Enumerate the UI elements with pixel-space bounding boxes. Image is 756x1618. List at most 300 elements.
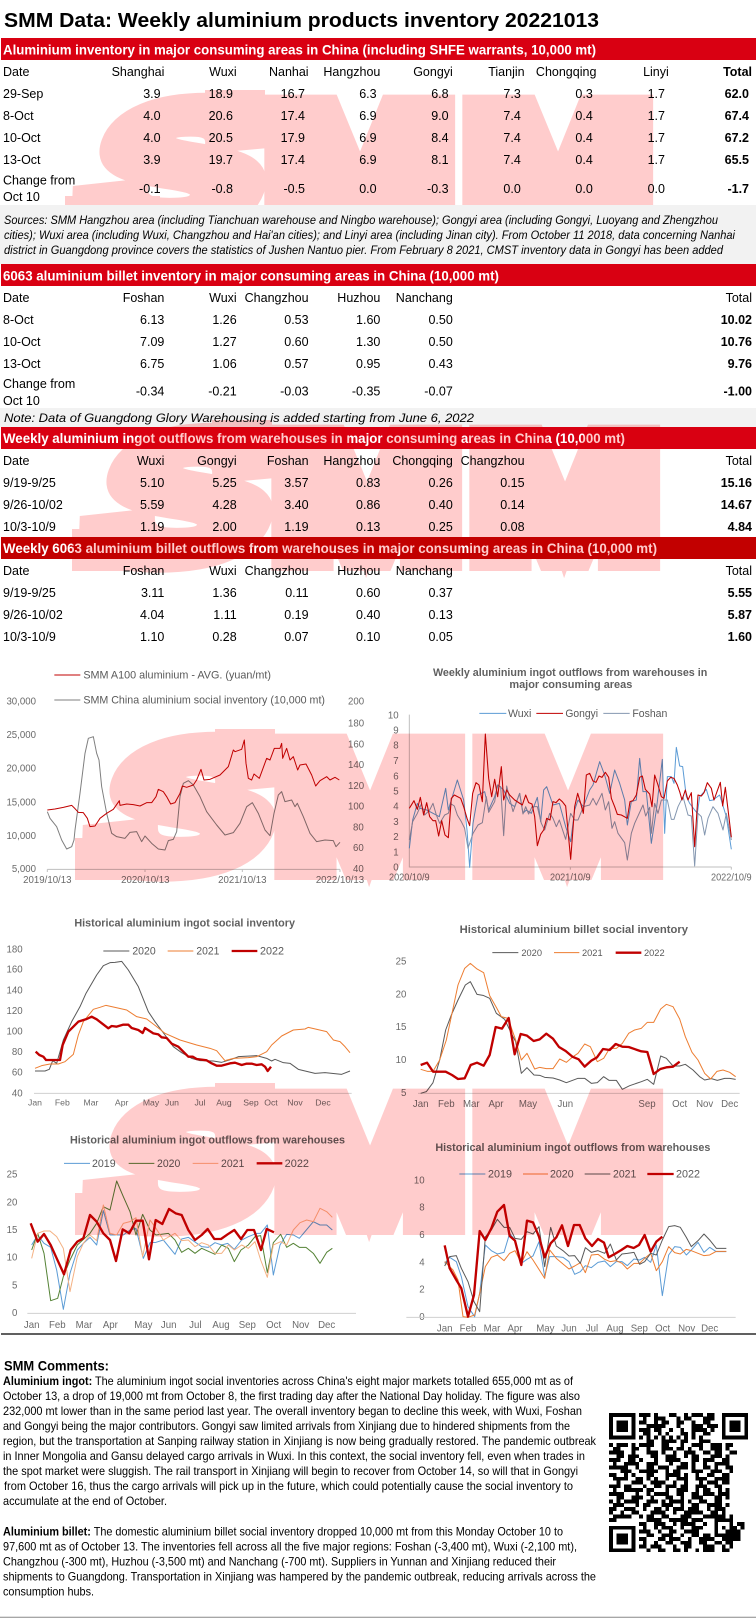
series: Foshan bbox=[409, 785, 731, 866]
y axis labels: 120 bbox=[7, 1006, 23, 1017]
y axis labels: 80 bbox=[12, 1047, 23, 1058]
header row: Gongyi bbox=[413, 65, 453, 79]
row: 10-Oct: 20.5 bbox=[209, 131, 233, 145]
aluminium billet comment: consumption hubs. bbox=[3, 1584, 94, 1598]
header row: Chongqing bbox=[536, 65, 596, 79]
header row: Huzhou bbox=[337, 291, 380, 305]
y axis labels bbox=[396, 956, 406, 1099]
aluminium ingot comment: in Inner Mongolia and Gansu delayed cargo arrivals in Wuxi. In this context, the social inventory fell, even when trades in bbox=[3, 1449, 585, 1463]
row: 9/19-9/25: 0.37 bbox=[428, 586, 453, 600]
row: 10-Oct: 17.9 bbox=[281, 131, 305, 145]
legend bbox=[459, 1169, 700, 1181]
aluminium billet comment: 97,600 mt as of October 13. The inventories fell across all the five major regions: Foshan (-3,400 mt), Wuxi (-2,100 mt), bbox=[3, 1540, 577, 1554]
series: 2019 bbox=[445, 1233, 726, 1317]
header row: Hangzhou bbox=[323, 65, 380, 79]
row: 29-Sep: 6.3 bbox=[359, 87, 377, 101]
series: 2020 bbox=[32, 1181, 332, 1301]
watermark: SMM logos: S bbox=[66, 401, 306, 596]
header row: Wuxi bbox=[209, 291, 237, 305]
row: 10-Oct: 10-Oct bbox=[3, 335, 41, 349]
row: 10-Oct: 1.7 bbox=[648, 131, 665, 145]
row: change from Oct 10: 0.0 bbox=[648, 182, 665, 196]
row: 29-Sep: 29-Sep bbox=[3, 87, 43, 101]
y axis labels: 8 bbox=[393, 741, 399, 752]
watermark: SMM logos: M bbox=[471, 400, 658, 595]
row: 8-Oct: 8-Oct bbox=[3, 313, 34, 327]
header row: Huzhou bbox=[337, 564, 380, 578]
band: billet inventory heading bbox=[1, 264, 756, 286]
y axis labels: 6 bbox=[393, 771, 399, 782]
x axis: Feb bbox=[49, 1320, 66, 1331]
row: 29-Sep: 18.9 bbox=[209, 87, 233, 101]
row: 8-Oct: 67.4 bbox=[725, 109, 749, 123]
header row: Nanchang bbox=[396, 291, 453, 305]
row: 9/19-9/25: 1.36 bbox=[212, 586, 237, 600]
y axis labels: 2 bbox=[419, 1285, 425, 1296]
note panel bbox=[0, 408, 756, 427]
y axis labels bbox=[388, 710, 399, 873]
row: 9/19-9/25: 9/19-9/25 bbox=[3, 586, 56, 600]
y axis labels: 25 bbox=[396, 956, 406, 967]
header row: Wuxi bbox=[209, 564, 237, 578]
row: change from Oct 10: -1.7 bbox=[727, 182, 749, 196]
header row: Hangzhou bbox=[323, 454, 380, 468]
legend: SMM A100 aluminium - AVG. (yuan/mt) bbox=[83, 670, 271, 682]
header row: Changzhou bbox=[245, 564, 309, 578]
aluminium ingot comment: Aluminium ingot: The aluminium ingot social inventories across China's eight major markets totalled 655,000 mt as of bbox=[3, 1374, 574, 1388]
QR code bbox=[609, 1413, 748, 1552]
y axis labels: 0 bbox=[12, 1308, 17, 1319]
row: change from Oct 10: -0.5 bbox=[283, 182, 305, 196]
right axis labels: 200 bbox=[348, 697, 364, 708]
right axis labels: 80 bbox=[353, 822, 364, 833]
legend bbox=[479, 708, 667, 720]
header row: Chongqing bbox=[392, 454, 453, 468]
series: 2022 bbox=[421, 1018, 680, 1079]
x axis: Dec bbox=[318, 1320, 335, 1331]
row: 9/26-10/02: 14.67 bbox=[721, 498, 752, 512]
x axis: Oct bbox=[264, 1097, 278, 1107]
y axis labels: 4 bbox=[393, 802, 399, 813]
x axis: May bbox=[519, 1099, 537, 1110]
row: change from Oct 10: -0.1 bbox=[139, 182, 161, 196]
header row: Foshan bbox=[267, 454, 309, 468]
row: 13-Oct: 9.76 bbox=[728, 357, 752, 371]
right axis labels: 60 bbox=[353, 843, 364, 854]
y axis labels bbox=[414, 1175, 425, 1323]
legend: 2021 bbox=[221, 1158, 244, 1170]
x axis: Feb bbox=[55, 1097, 70, 1107]
series: 2022 bbox=[445, 1205, 662, 1317]
table: aluminium inventory bbox=[0, 38, 756, 264]
chart: historical billet social inventory bbox=[396, 924, 740, 1110]
y axis labels: 180 bbox=[7, 944, 23, 955]
x axis: Aug bbox=[216, 1097, 232, 1107]
row: 13-Oct: 1.7 bbox=[648, 153, 665, 167]
row: 9/19-9/25: 3.57 bbox=[284, 476, 309, 490]
x axis: Dec bbox=[721, 1099, 738, 1110]
right axis labels: 160 bbox=[348, 739, 364, 750]
chart title: Historical aluminium ingot social inventory bbox=[74, 918, 296, 930]
row: change from Oct 10 bbox=[3, 174, 749, 204]
row: change from Oct 10: -0.3 bbox=[427, 182, 449, 196]
row: 10-Oct: 0.4 bbox=[575, 131, 593, 145]
header row: Wuxi bbox=[137, 454, 164, 468]
row: 10-Oct: 1.30 bbox=[356, 335, 380, 349]
y axis labels: 60 bbox=[12, 1068, 23, 1079]
row: 9/26-10/02: 3.40 bbox=[284, 498, 309, 512]
header row: Date bbox=[3, 564, 29, 578]
row: change from Oct 10: -0.07 bbox=[424, 384, 453, 398]
row: 13-Oct bbox=[3, 153, 749, 167]
row: 10-Oct: 6.9 bbox=[359, 131, 377, 145]
legend: 2021 bbox=[582, 948, 603, 958]
row: 13-Oct: 0.4 bbox=[575, 153, 593, 167]
row: 10/3-10/9: 1.19 bbox=[284, 520, 309, 534]
y axis labels: 4 bbox=[419, 1257, 425, 1268]
series: 2022 bbox=[31, 1209, 274, 1274]
row: 10/3-10/9: 1.60 bbox=[728, 630, 752, 644]
header row bbox=[3, 65, 752, 79]
row: 10-Oct: 10.76 bbox=[721, 335, 752, 349]
table: billet outflows bbox=[1, 537, 756, 644]
row: 29-Sep: 1.7 bbox=[648, 87, 665, 101]
row: 10-Oct: 10-Oct bbox=[3, 131, 41, 145]
y axis labels: 5 bbox=[12, 1280, 17, 1291]
sources note panel bbox=[0, 205, 756, 264]
row: 9/26-10/02: 0.19 bbox=[284, 608, 309, 622]
aluminium ingot comment: 232,000 mt lower than in the same period last year. The overall inventory began to decline this week, with Wuxi, Foshan bbox=[3, 1404, 582, 1418]
header row: Changzhou bbox=[461, 454, 525, 468]
header row: Date bbox=[3, 291, 29, 305]
series: 2021 bbox=[421, 963, 736, 1079]
axes bbox=[389, 715, 752, 884]
header row: Foshan bbox=[123, 564, 164, 578]
band: billet outflows heading: Weekly 6063 aluminium billet outflows from warehouses in major consuming areas in China (10,000 mt) bbox=[3, 540, 657, 556]
row: 10-Oct: 7.09 bbox=[140, 335, 164, 349]
row: 10/3-10/9 bbox=[3, 630, 752, 644]
chart title: major consuming areas bbox=[509, 679, 632, 691]
header row: Date bbox=[3, 454, 29, 468]
left axis labels: 20,000 bbox=[6, 764, 36, 775]
right axis labels: 140 bbox=[348, 760, 364, 771]
row: 29-Sep: 3.9 bbox=[143, 87, 161, 101]
row: 9/19-9/25: 0.15 bbox=[500, 476, 525, 490]
watermark: SMM logos: M bbox=[276, 1064, 463, 1259]
row: 9/26-10/02: 0.14 bbox=[500, 498, 525, 512]
x axis: May bbox=[536, 1323, 555, 1334]
row: 9/26-10/02: 1.11 bbox=[213, 608, 237, 622]
row: 13-Oct: 1.06 bbox=[212, 357, 237, 371]
x axis: Mar bbox=[84, 1097, 99, 1107]
left axis labels bbox=[6, 696, 36, 875]
x axis: Apr bbox=[103, 1320, 119, 1331]
x axis bbox=[28, 1093, 352, 1107]
watermark: SMM logos: S bbox=[69, 1065, 309, 1260]
x axis: May bbox=[134, 1320, 153, 1331]
header row: Nanchang bbox=[396, 564, 453, 578]
row: 10-Oct bbox=[3, 335, 752, 349]
y axis labels: 15 bbox=[396, 1022, 406, 1033]
left axis labels: 5,000 bbox=[12, 864, 36, 875]
y axis labels: 20 bbox=[396, 989, 406, 1000]
row: 8-Oct: 20.6 bbox=[209, 109, 233, 123]
row: 10/3-10/9: 0.13 bbox=[356, 520, 380, 534]
x axis: Jul bbox=[189, 1320, 202, 1331]
row: 13-Oct: 0.57 bbox=[284, 357, 309, 371]
row: 8-Oct: 0.53 bbox=[284, 313, 309, 327]
series: 2020 bbox=[421, 982, 736, 1093]
chart title: Historical aluminium ingot outflows from warehouses bbox=[435, 1142, 710, 1154]
row: 13-Oct: 13-Oct bbox=[3, 153, 41, 167]
table: ingot outflows bbox=[1, 427, 756, 534]
y axis labels: 160 bbox=[7, 965, 23, 976]
series: 2022 bbox=[36, 1017, 271, 1071]
SMM comments bbox=[3, 1358, 597, 1598]
x axis: Aug bbox=[212, 1320, 230, 1331]
row: 10/3-10/9: 1.19 bbox=[140, 520, 164, 534]
row: 13-Oct: 0.95 bbox=[356, 357, 380, 371]
x axis: Apr bbox=[115, 1097, 129, 1107]
header row: Changzhou bbox=[245, 291, 309, 305]
row: 8-Oct: 0.4 bbox=[575, 109, 593, 123]
x axis: Jul bbox=[586, 1323, 598, 1334]
y axis labels: 10 bbox=[414, 1175, 425, 1186]
row: 8-Oct: 7.4 bbox=[503, 109, 521, 123]
aluminium billet comment: shipments to Guangdong. Transportation in Xinjiang was hampered by the pandemic outbreak, reducing arrivals across the bbox=[3, 1570, 596, 1584]
band: billet inventory heading: 6063 aluminium billet inventory in major consuming areas in China (10,000 mt) bbox=[3, 268, 499, 284]
aluminium ingot comment bbox=[3, 1374, 597, 1508]
header row: Shanghai bbox=[112, 65, 164, 79]
band: ingot outflows heading bbox=[1, 427, 756, 449]
row: 8-Oct: 8-Oct bbox=[3, 109, 34, 123]
watermark: SMM logos bbox=[59, 70, 661, 1260]
legend bbox=[64, 1158, 309, 1170]
row: 9/19-9/25: 5.55 bbox=[728, 586, 752, 600]
chart title bbox=[433, 667, 708, 691]
x axis: 2022/10/13 bbox=[316, 875, 364, 886]
x axis: Sep bbox=[638, 1099, 656, 1110]
series: social inventory bbox=[47, 737, 340, 850]
y axis labels: 5 bbox=[401, 1088, 406, 1099]
row: 9/26-10/02: 5.59 bbox=[140, 498, 164, 512]
aluminium billet comment: Aluminium billet: The domestic aluminium billet social inventory dropped 10,000 mt from this Monday October 10 to bbox=[3, 1524, 563, 1538]
row: 10-Oct: 0.50 bbox=[428, 335, 453, 349]
x axis: May bbox=[143, 1097, 160, 1107]
row: 8-Oct: 1.60 bbox=[356, 313, 380, 327]
row: change from Oct 10: 0.0 bbox=[503, 182, 521, 196]
row: 29-Sep: 62.0 bbox=[725, 87, 749, 101]
legend: 2022 bbox=[644, 948, 665, 958]
x axis: Nov bbox=[287, 1097, 303, 1107]
series: Gongyi bbox=[409, 734, 731, 859]
row: 10-Oct: 8.4 bbox=[431, 131, 449, 145]
row: 9/19-9/25: 0.60 bbox=[356, 586, 380, 600]
left axis labels: 30,000 bbox=[6, 696, 36, 707]
row: 9/26-10/02: 9/26-10/02 bbox=[3, 608, 63, 622]
x axis: Jun bbox=[161, 1320, 176, 1331]
x axis: Jul bbox=[194, 1097, 206, 1107]
row: change from Oct 10: -1.00 bbox=[724, 384, 752, 398]
row: 13-Oct: 65.5 bbox=[725, 153, 749, 167]
row: change from Oct 10: 0.0 bbox=[359, 182, 377, 196]
band: aluminium inventory heading bbox=[1, 38, 756, 60]
comments heading: SMM Comments: bbox=[4, 1358, 109, 1374]
legend bbox=[492, 948, 665, 958]
series: 2020 bbox=[445, 1247, 726, 1317]
note panel: Note: Data of Guangdong Glory Warehousing is added starting from June 6, 2022 bbox=[4, 411, 474, 425]
y axis labels bbox=[7, 1170, 17, 1319]
y axis labels: 0 bbox=[419, 1312, 425, 1323]
row: 9/19-9/25: 5.10 bbox=[140, 476, 164, 490]
x axis: Jan bbox=[24, 1320, 39, 1331]
row: 10/3-10/9: 2.00 bbox=[212, 520, 237, 534]
legend: 2020 bbox=[550, 1169, 574, 1181]
row: 10-Oct: 1.27 bbox=[212, 335, 237, 349]
row: 8-Oct: 10.02 bbox=[721, 313, 752, 327]
row: 13-Oct: 17.4 bbox=[281, 153, 305, 167]
x axis: Sep bbox=[243, 1097, 259, 1107]
header row: Nanhai bbox=[269, 65, 309, 79]
row: change from Oct 10: Oct 10 bbox=[3, 190, 40, 204]
x axis bbox=[413, 1093, 740, 1110]
row: 29-Sep: 16.7 bbox=[281, 87, 305, 101]
row: 13-Oct: 7.4 bbox=[503, 153, 521, 167]
y axis labels: 8 bbox=[419, 1203, 425, 1214]
band: billet outflows heading bbox=[1, 537, 756, 559]
aluminium ingot comment: from October 16, thus the cargo arrivals will pick up in the future, which could potentially cause the social inventory to bbox=[4, 1479, 573, 1493]
header row: Linyi bbox=[643, 65, 669, 79]
legend: 2021 bbox=[613, 1169, 636, 1181]
row: 29-Sep: 6.8 bbox=[431, 87, 449, 101]
row: 9/19-9/25 bbox=[3, 586, 752, 600]
row: 9/26-10/02: 4.28 bbox=[212, 498, 237, 512]
header row: Total bbox=[726, 291, 752, 305]
series: A100 price bbox=[47, 740, 339, 827]
row: 8-Oct: 1.7 bbox=[648, 109, 665, 123]
row: 8-Oct bbox=[3, 313, 752, 327]
header row: Total bbox=[726, 564, 752, 578]
header row: Date bbox=[3, 65, 29, 79]
y axis labels bbox=[7, 944, 23, 1099]
row: change from Oct 10 bbox=[3, 377, 752, 408]
row: 10/3-10/9: 10/3-10/9 bbox=[3, 520, 56, 534]
legend: 2022 bbox=[260, 946, 284, 958]
row: 8-Oct: 0.50 bbox=[428, 313, 453, 327]
row: change from Oct 10: Change from bbox=[3, 174, 75, 188]
band: ingot outflows heading: Weekly aluminium ingot outflows from warehouses in major consuming areas in China (10,000 mt) bbox=[3, 430, 625, 446]
chart: historical ingot social inventory bbox=[7, 918, 352, 1107]
legend: SMM China aluminium social inventory (10,000 mt) bbox=[83, 695, 325, 707]
y axis labels: 25 bbox=[7, 1170, 17, 1181]
x axis: Jan bbox=[413, 1099, 428, 1110]
title: SMM Data: Weekly aluminium products inventory 20221013 bbox=[4, 10, 599, 32]
x axis: Dec bbox=[701, 1323, 718, 1334]
x axis: Oct bbox=[266, 1320, 281, 1331]
x axis: Jan bbox=[437, 1323, 452, 1334]
y axis labels: 7 bbox=[393, 756, 399, 767]
legend bbox=[103, 946, 284, 958]
row: 9/26-10/02: 0.86 bbox=[356, 498, 380, 512]
row: 10-Oct: 67.2 bbox=[725, 131, 749, 145]
row: 10/3-10/9: 1.10 bbox=[140, 630, 164, 644]
watermark: SMM logos: S bbox=[59, 71, 299, 266]
left axis labels: 10,000 bbox=[6, 831, 36, 842]
header row: Wuxi bbox=[209, 65, 237, 79]
row: 9/19-9/25 bbox=[3, 476, 752, 490]
row: 13-Oct: 3.9 bbox=[143, 153, 161, 167]
legend: 2020 bbox=[132, 946, 156, 958]
row: 9/19-9/25: 15.16 bbox=[721, 476, 752, 490]
row: 9/26-10/02: 5.87 bbox=[728, 608, 752, 622]
row: 9/19-9/25: 0.83 bbox=[356, 476, 380, 490]
watermark: SMM logos: M bbox=[266, 70, 453, 265]
right axis labels: 40 bbox=[353, 864, 364, 875]
chart: A100 price vs social inventory bbox=[6, 670, 364, 886]
x axis: 2021/10/13 bbox=[218, 875, 267, 886]
row: change from Oct 10: -0.03 bbox=[280, 384, 309, 398]
left axis labels: 25,000 bbox=[6, 730, 36, 741]
row: 10/3-10/9: 0.07 bbox=[284, 630, 309, 644]
x axis: Oct bbox=[672, 1099, 687, 1110]
chart title: Historical aluminium billet social inventory bbox=[460, 924, 689, 936]
header row bbox=[3, 564, 752, 578]
y axis labels: 10 bbox=[396, 1055, 406, 1066]
x axis: Jan bbox=[28, 1097, 42, 1107]
chart: historical billet outflows bbox=[406, 1142, 736, 1334]
axes: 2022/10/9 bbox=[711, 873, 752, 884]
watermark: SMM logos: M bbox=[276, 709, 463, 904]
x axis: Nov bbox=[678, 1323, 695, 1334]
x axis: Jun bbox=[558, 1099, 573, 1110]
row: 9/26-10/02: 4.04 bbox=[140, 608, 164, 622]
row: 8-Oct: 6.13 bbox=[140, 313, 164, 327]
series: 2019 bbox=[32, 1211, 332, 1309]
row: change from Oct 10: Change from bbox=[3, 377, 75, 391]
row: 9/26-10/02: 0.40 bbox=[356, 608, 380, 622]
row: 9/26-10/02 bbox=[3, 498, 752, 512]
y axis labels: 1 bbox=[393, 847, 399, 858]
table: 6063 billet inventory bbox=[0, 264, 756, 427]
row: 10/3-10/9 bbox=[3, 520, 752, 534]
row: 9/19-9/25: 0.11 bbox=[285, 586, 309, 600]
row: 13-Oct: 6.75 bbox=[140, 357, 164, 371]
row: 13-Oct: 19.7 bbox=[209, 153, 233, 167]
x axis: Apr bbox=[507, 1323, 523, 1334]
row: change from Oct 10: 0.0 bbox=[575, 182, 593, 196]
x axis bbox=[23, 869, 364, 886]
aluminium billet comment bbox=[3, 1524, 596, 1598]
chart title: Historical aluminium ingot outflows from warehouses bbox=[70, 1135, 345, 1147]
row: 13-Oct: 13-Oct bbox=[3, 357, 41, 371]
y axis labels: 20 bbox=[7, 1197, 17, 1208]
y axis labels: 3 bbox=[393, 817, 399, 828]
row: 9/19-9/25: 0.26 bbox=[428, 476, 453, 490]
legend: 2020 bbox=[157, 1158, 180, 1170]
y axis labels: 6 bbox=[419, 1230, 425, 1241]
right axis labels: 120 bbox=[348, 781, 364, 792]
row: 10/3-10/9: 0.25 bbox=[428, 520, 453, 534]
row: 9/19-9/25: 9/19-9/25 bbox=[3, 476, 56, 490]
row: change from Oct 10: -0.34 bbox=[136, 384, 164, 398]
row: 10-Oct: 0.60 bbox=[284, 335, 309, 349]
series: 2020 bbox=[35, 961, 350, 1074]
row: 10-Oct: 4.0 bbox=[143, 131, 161, 145]
left axis labels: 15,000 bbox=[6, 797, 36, 808]
row: 10/3-10/9: 10/3-10/9 bbox=[3, 630, 56, 644]
aluminium ingot comment: region, but the transportation at Sanping railway station in Xinjiang is now being gradually restored. The pandemic outbreak bbox=[3, 1434, 597, 1448]
legend: 2022 bbox=[285, 1158, 309, 1170]
